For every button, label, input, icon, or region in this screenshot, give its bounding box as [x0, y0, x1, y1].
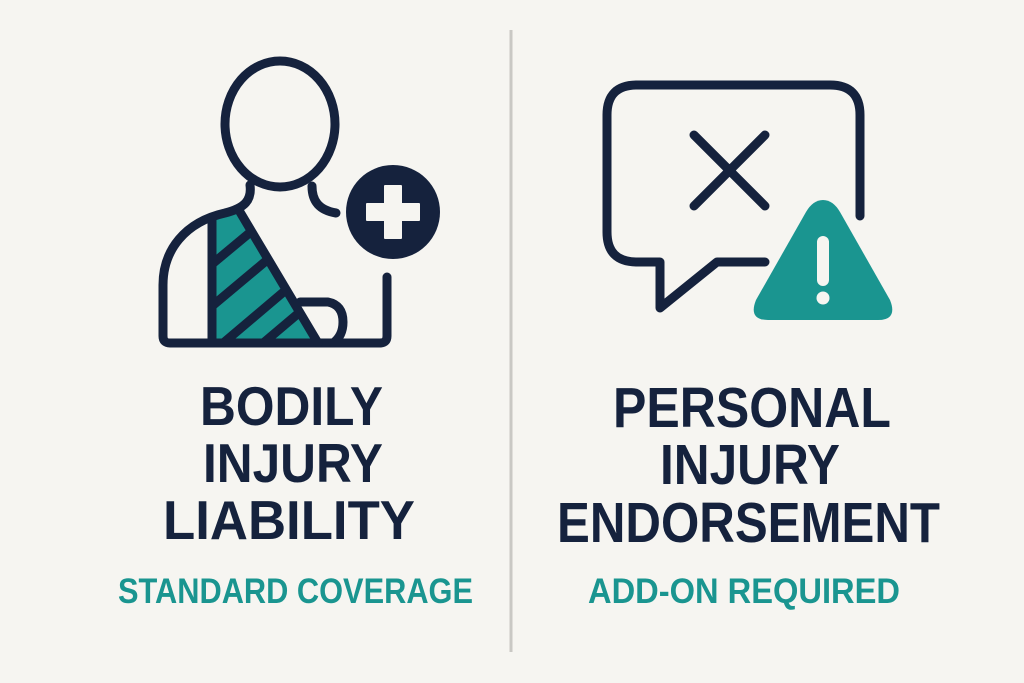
icon: speech bubble with X — [607, 85, 860, 308]
title: personal injury endorsement: PERSONAL — [613, 376, 891, 440]
icon: medical plus badge — [346, 165, 440, 259]
title: bodily injury liability: BODILY — [200, 375, 383, 437]
icon: injured person with medical plus — [163, 61, 387, 350]
icon: warning triangle — [754, 200, 892, 320]
title: personal injury endorsement — [557, 376, 940, 555]
title: bodily injury liability: INJURY — [203, 432, 383, 494]
subtitle: add-on required: ADD-ON REQUIRED — [588, 572, 900, 611]
title: bodily injury liability — [163, 375, 415, 551]
title: personal injury endorsement: INJURY — [660, 433, 840, 497]
subtitle: standard coverage: STANDARD COVERAGE — [118, 572, 473, 611]
title: bodily injury liability: LIABILITY — [163, 489, 415, 551]
title: personal injury endorsement: ENDORSEMENT — [557, 491, 940, 555]
